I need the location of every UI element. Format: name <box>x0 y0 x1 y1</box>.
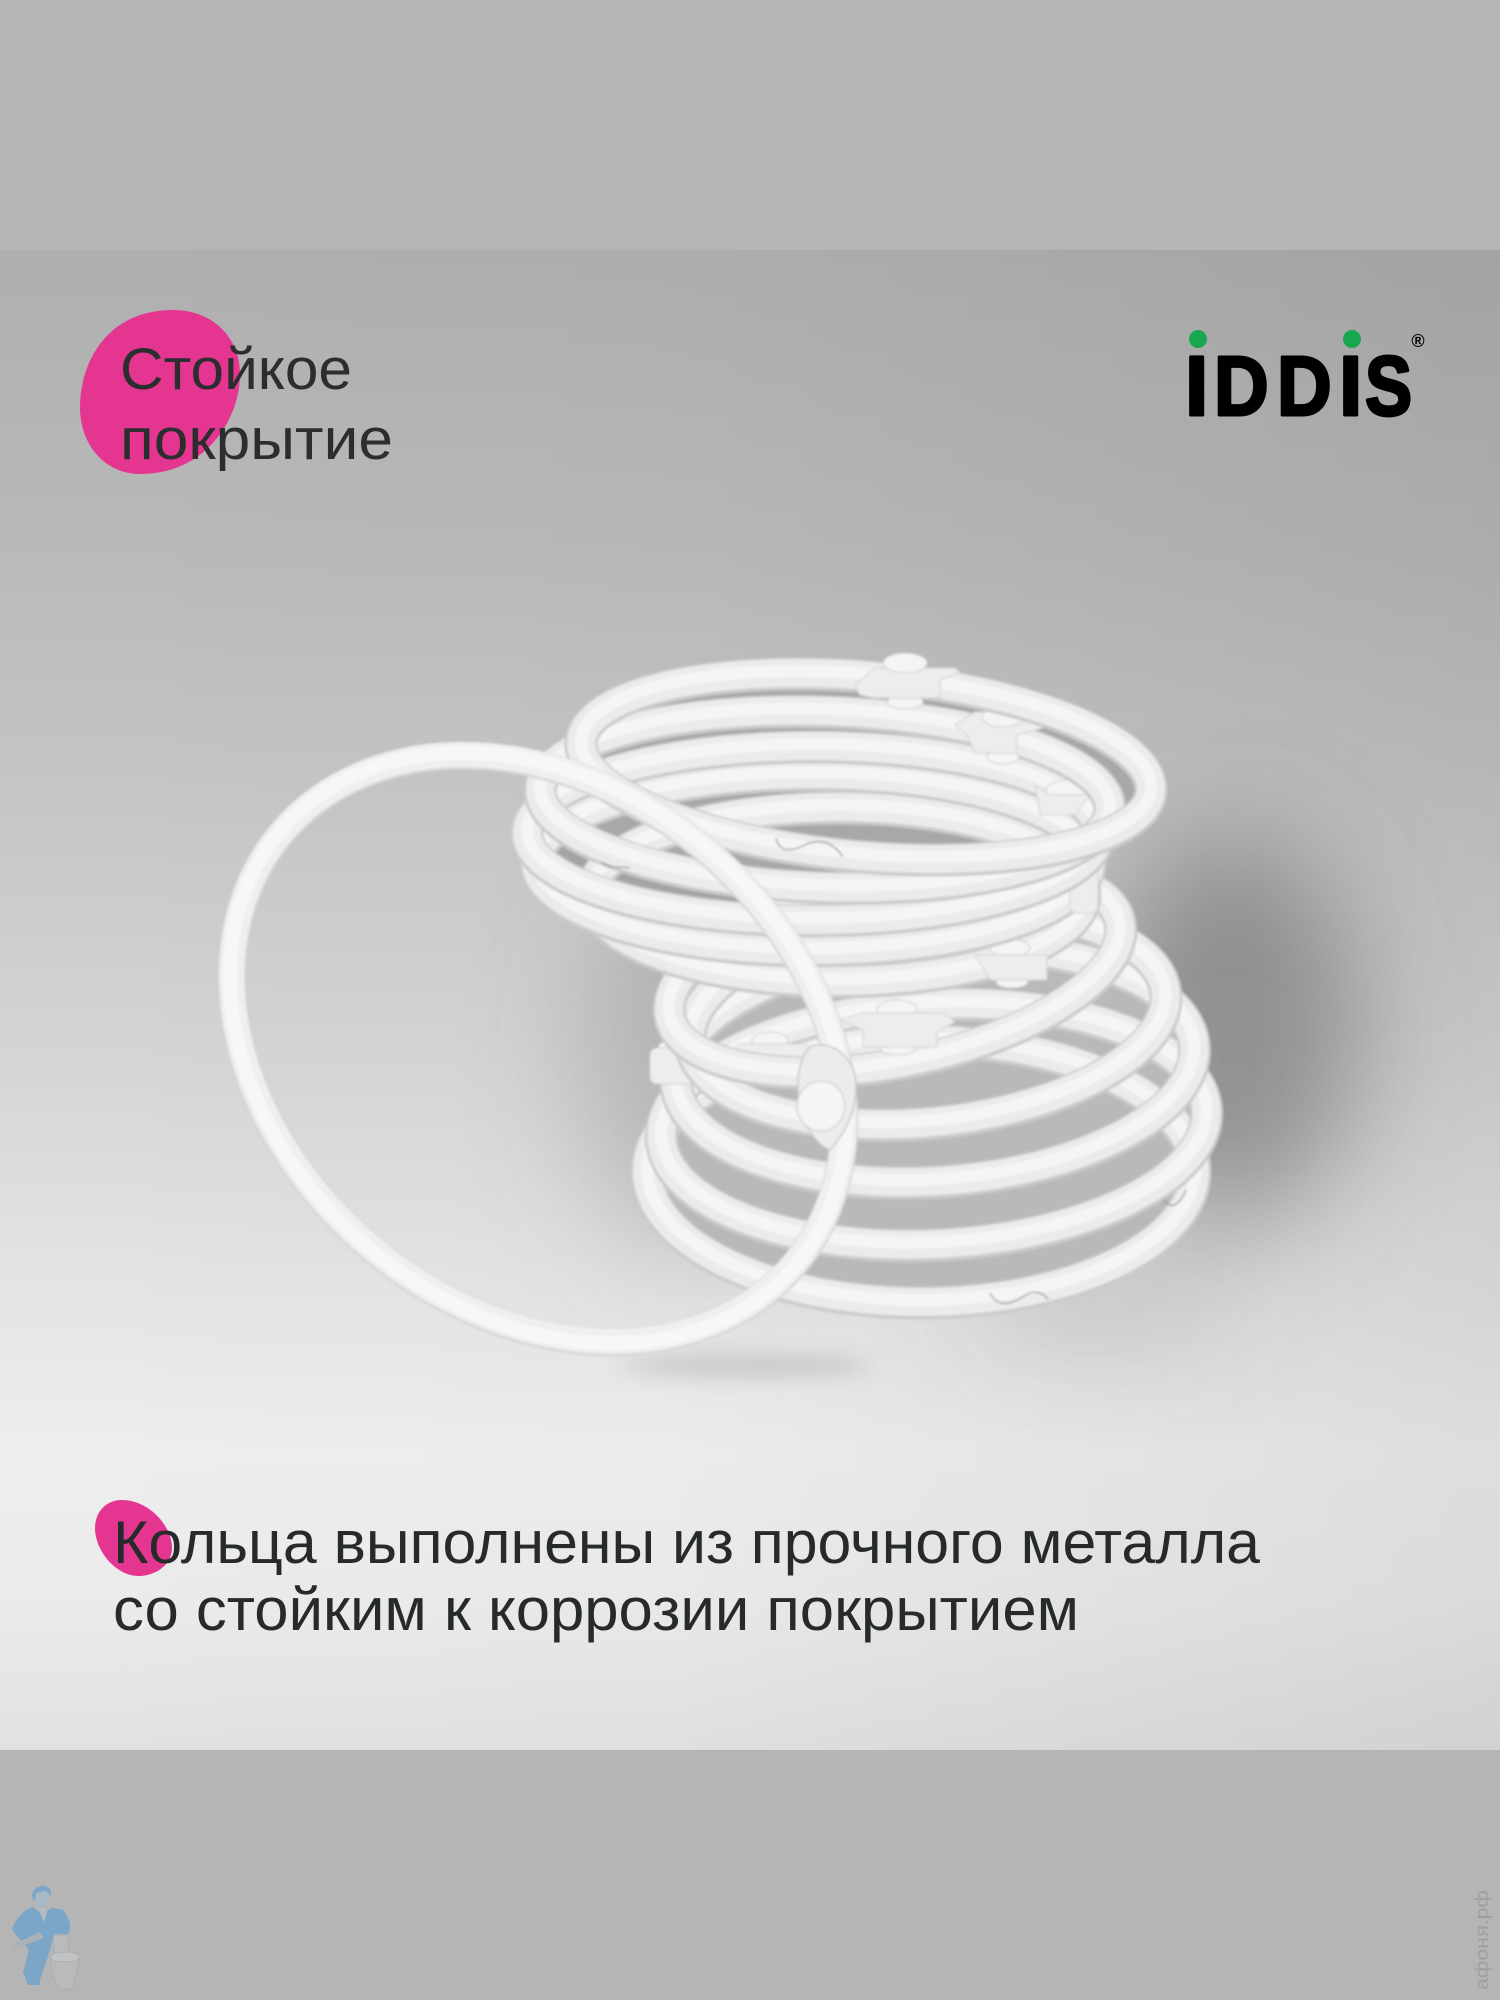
logo: IDDIS: I <box>1339 339 1362 433</box>
watermark icon: plumber with toilet <box>12 1886 80 1989</box>
blob: caption accent <box>95 1500 172 1576</box>
clasp 6 <box>840 1000 955 1055</box>
ring seam lines <box>602 838 1186 1303</box>
ring 4 <box>536 772 1090 951</box>
clasp 7 <box>735 1032 811 1085</box>
front standing ring <box>111 631 965 1465</box>
photo panel: studio background with rings <box>0 250 1500 1750</box>
top grey band <box>0 0 1500 250</box>
ring 7 <box>679 886 1177 1147</box>
watermark text: афоня.рф <box>1472 1890 1492 1990</box>
clasp 8 <box>650 1040 710 1084</box>
stack interior <box>527 652 1213 1303</box>
ring 9 <box>655 988 1213 1259</box>
logo: IDDIS: D <box>1214 339 1269 433</box>
ring 3 <box>527 744 1099 921</box>
blob: heading accent <box>80 310 240 474</box>
ring 1, top <box>573 649 1159 882</box>
clasp 3 <box>1035 780 1090 815</box>
ring stack <box>527 649 1213 1303</box>
clasp 5 <box>975 939 1047 988</box>
caption: Кольца выполнены из прочного металла <box>113 1509 1261 1576</box>
clasp 1 <box>855 653 960 709</box>
clasp 4 <box>1070 867 1098 913</box>
caption: со стойким к коррозии покрытием <box>113 1576 1079 1643</box>
front ring clasp <box>797 1045 856 1150</box>
logo: IDDIS <box>1185 330 1425 433</box>
ring 8 <box>667 927 1203 1200</box>
ring 5 <box>591 805 1085 982</box>
ring 2 <box>537 699 1113 898</box>
ring 6 <box>650 828 1139 1109</box>
heading: Стойкое <box>120 337 352 402</box>
logo: IDDIS: S <box>1365 340 1412 433</box>
stack cast shadow <box>580 835 1360 1326</box>
ring 10 <box>647 1038 1195 1303</box>
heading: покрытие <box>120 407 393 472</box>
bottom grey band <box>0 1750 1500 2000</box>
front ring ground shadow <box>620 1357 870 1375</box>
clasp 2 <box>955 707 1045 764</box>
logo: IDDIS: D <box>1277 339 1332 433</box>
logo: IDDIS: ® <box>1411 331 1425 351</box>
logo: IDDIS: I <box>1185 339 1208 433</box>
